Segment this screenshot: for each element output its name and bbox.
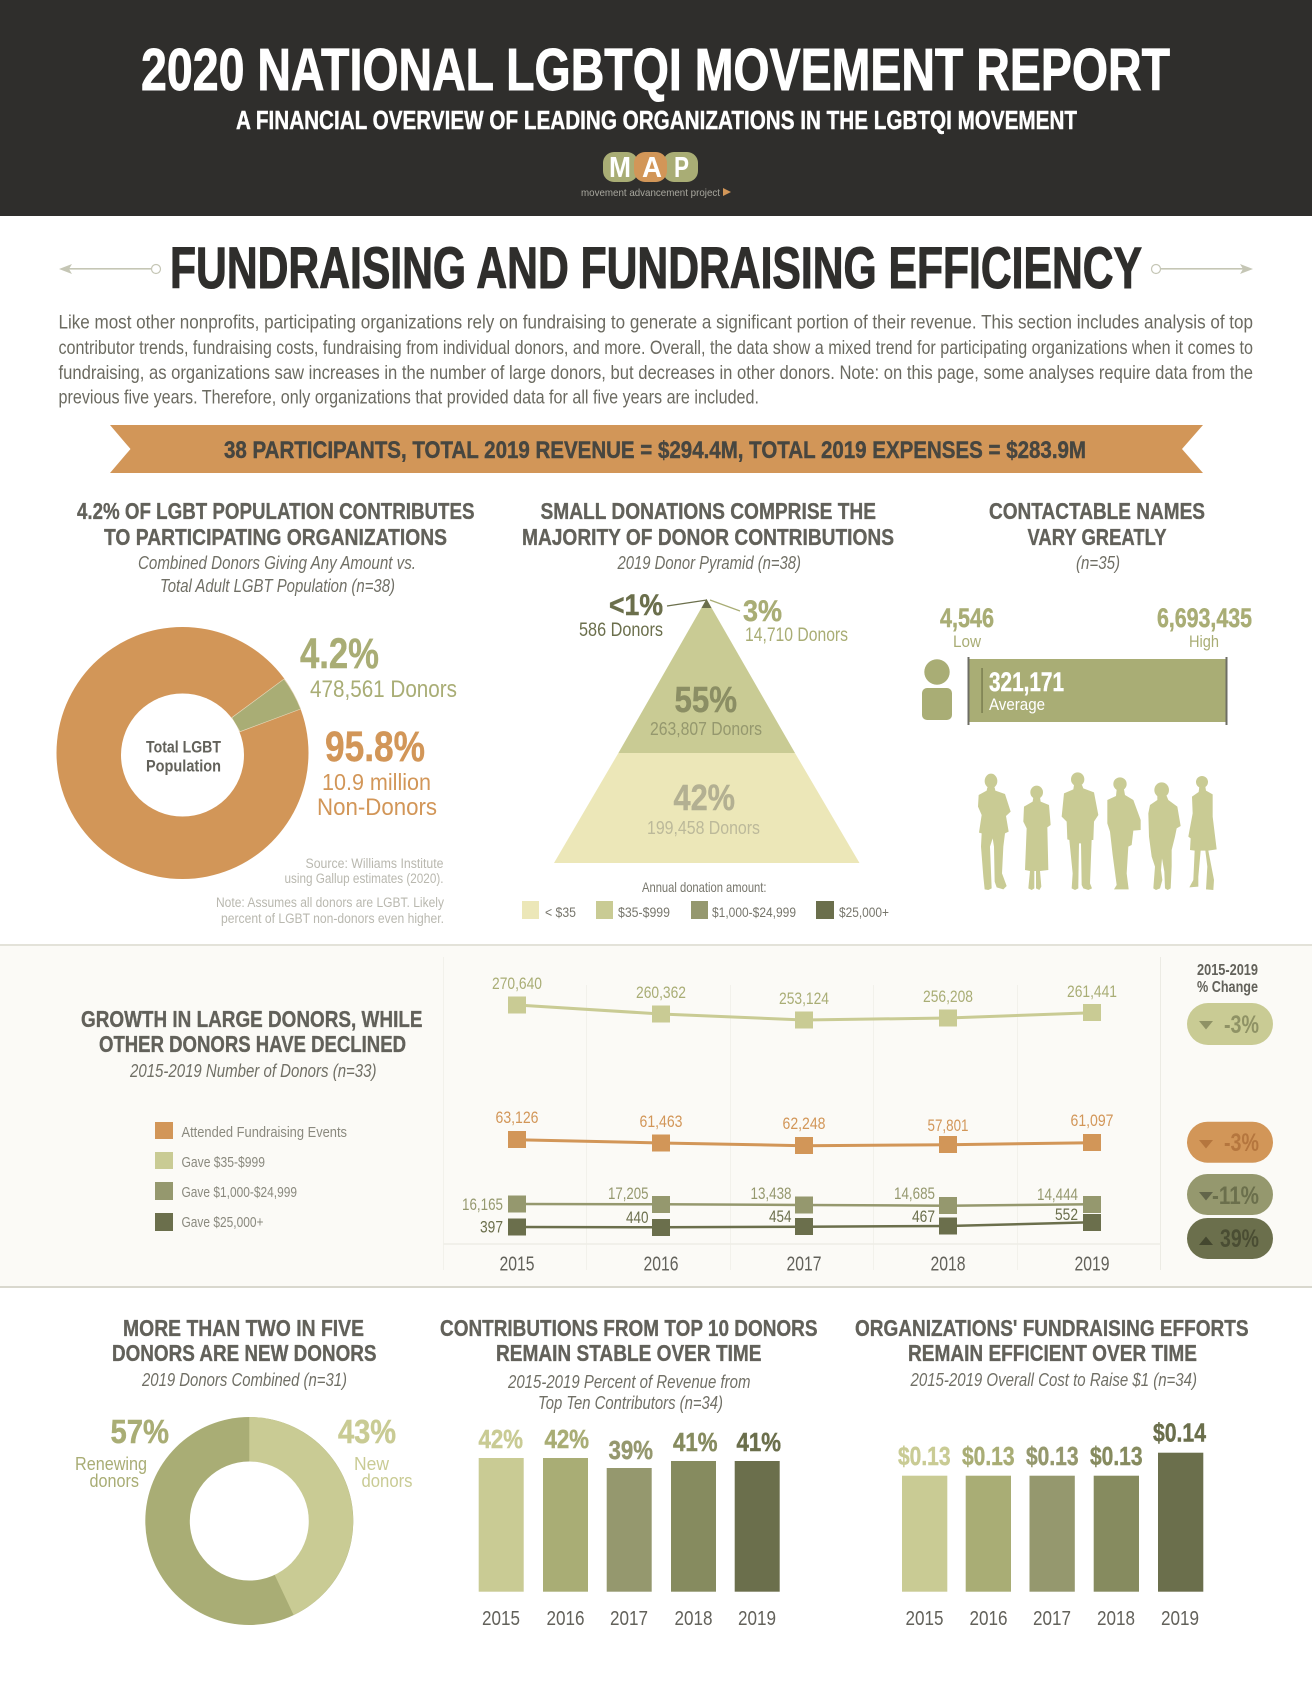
x-axis years: 2019 [738,1608,776,1630]
bar chart: 41% [673,1427,718,1457]
series: gave $1,000-$24,999: 13,438 [750,1185,792,1203]
series: attended fundraising events: 57,801 [928,1117,968,1135]
donut chart [56,627,308,879]
x-axis years: 2015 [906,1608,944,1630]
heading: TO PARTICIPATING ORGANIZATIONS [104,524,447,550]
series: gave $25,000+: 467 [912,1208,935,1226]
x-axis years [500,1254,1110,1276]
subheading: Combined Donors Giving Any Amount vs. [138,552,416,573]
x-axis years: 2018 [674,1608,712,1630]
stat: non-donors [317,723,437,821]
heading [81,1006,422,1057]
stat: donors: 478,561 Donors [310,676,457,703]
series: gave $35-$999 [492,975,1117,1028]
label: new donors [338,1413,412,1491]
x-axis years: 2015 [500,1254,534,1276]
heading: GROWTH IN LARGE DONORS, WHILE [81,1006,422,1032]
stat: low: Low [953,632,982,651]
x-axis years: 2015 [482,1608,520,1630]
label: renewing donors: 57% [110,1413,169,1450]
legend: Gave $35-$999 [182,1154,265,1171]
series: gave $35-$999: 261,441 [1067,983,1117,1001]
heading: DONORS ARE NEW DONORS [112,1340,376,1366]
heading: OTHER DONORS HAVE DECLINED [99,1031,406,1057]
pill: gave $25,000+: 39% [1220,1225,1259,1253]
icon: people silhouettes [978,772,1217,890]
series: attended fundraising events [496,1109,1114,1154]
panel: LGBT population donut [56,498,474,926]
bar chart: $0.13 [962,1441,1014,1471]
subheading: Total Adult LGBT Population (n=38) [160,575,395,596]
label: under 1%: 586 Donors [579,619,663,641]
heading: MORE THAN TWO IN FIVE [123,1315,364,1341]
bar chart [898,1418,1206,1592]
series: gave $25,000+: 440 [626,1209,648,1227]
legend: $35-$999 [618,904,670,920]
heading [440,1315,818,1366]
series: gave $1,000-$24,999: 14,685 [894,1185,935,1203]
source note: Source: Williams Institute [306,856,444,871]
heading: REMAIN STABLE OVER TIME [496,1340,762,1366]
pill: gave $1,000-$24,999 [1187,1174,1273,1215]
label: 3%: 14,710 Donors [745,624,848,646]
heading [77,498,474,550]
donut chart: Total LGBT [146,738,222,757]
x-axis years: 2018 [930,1254,966,1276]
legend: Annual donation amount: [642,879,766,895]
header banner [0,0,1312,216]
stat: non-donors: 10.9 million [322,769,431,795]
series: gave $25,000+: 397 [480,1219,503,1237]
ribbon banner: 38 PARTICIPANTS, TOTAL 2019 REVENUE = $294.4M, TOTAL 2019 EXPENSES = $283.9M [224,437,1086,464]
x-axis years: 2017 [1033,1608,1071,1630]
logo: MAP: movement advancement project [581,187,720,199]
x-axis years: 2019 [1074,1254,1110,1276]
range bar: 321,171 [989,667,1064,697]
stat: low: 4,546 [940,603,994,633]
x-axis years: 2016 [644,1254,678,1276]
pill: gave $35-$999: -3% [1224,1011,1259,1039]
x-axis years: 2017 [610,1608,648,1630]
percent change column [1187,962,1273,1259]
subheading [507,1371,750,1413]
arrow: right ornament [1152,264,1253,274]
stat: low [940,603,994,651]
series: gave $35-$999: 253,124 [779,990,829,1008]
x-axis years [482,1608,776,1630]
label: under 1% [579,589,663,641]
label: 55%: 263,807 Donors [650,718,762,739]
logo: MAP: M [609,152,631,184]
pyramid chart [554,599,860,863]
logo: MAP: P [674,152,689,184]
bar chart: $0.13 [1026,1441,1078,1471]
label: 55% [650,679,762,739]
series: gave $1,000-$24,999 [462,1185,1101,1214]
panel: top 10 donors bar chart [440,1315,818,1630]
x-axis years: 2019 [1161,1608,1199,1630]
range bar: Average [989,695,1045,714]
stat: high [1157,603,1252,651]
subheading: 2015-2019 Number of Donors (n=33) [129,1060,376,1081]
stat: high: 6,693,435 [1157,603,1252,633]
legend: Gave $25,000+ [182,1214,264,1231]
heading [989,498,1205,550]
bar chart: 41% [736,1427,781,1457]
subheading: 2019 Donors Combined (n=31) [141,1369,347,1390]
column heading: 2015-2019 [1197,962,1258,979]
series: attended fundraising events: 61,097 [1070,1112,1114,1130]
label: new donors: New [354,1453,390,1474]
bar chart: $0.13 [1090,1441,1142,1471]
legend: $1,000-$24,999 [712,904,796,920]
subheading: 2019 Donor Pyramid (n=38) [617,552,801,573]
bar chart [478,1424,781,1592]
legend: < $35 [545,904,576,920]
subheading: 2015-2019 Percent of Revenue from [507,1371,750,1392]
label: 42% [647,777,760,838]
intro paragraph: previous five years. Therefore, only organizations that provided data for all five years are included. [58,386,759,408]
stat: non-donors: 95.8% [325,723,425,771]
x-axis years [906,1608,1199,1630]
subheading: 2015-2019 Overall Cost to Raise $1 (n=34) [910,1369,1197,1390]
series: gave $25,000+: 454 [769,1208,792,1226]
source note: percent of LGBT non-donors even higher. [221,911,444,926]
bar chart: $0.14 [1153,1418,1206,1448]
label: 3% [743,595,848,646]
bar chart: $0.13 [898,1441,950,1471]
panel: contactable names [922,498,1252,890]
column heading [1197,962,1258,996]
logo: MAP: A [642,152,662,184]
label: 42%: 199,458 Donors [647,817,760,838]
arrow: left ornament [59,264,160,274]
series: attended fundraising events: 61,463 [640,1113,682,1131]
pill: gave $1,000-$24,999: -11% [1212,1182,1259,1210]
series: gave $35-$999: 256,208 [923,988,973,1006]
stat: non-donors: Non-Donors [317,794,437,821]
bar chart: 42% [478,1424,523,1454]
panel: cost to raise $1 bar chart [855,1315,1248,1630]
intro paragraph [58,312,1253,408]
heading: REMAIN EFFICIENT OVER TIME [908,1340,1197,1366]
series: gave $25,000+: 552 [1055,1206,1078,1224]
source note: Note: Assumes all donors are LGBT. Likely [216,895,444,910]
series: attended fundraising events: 63,126 [496,1109,538,1127]
icon: person [922,659,952,720]
label: renewing donors: donors [90,1470,139,1491]
panel: donor pyramid [522,498,894,920]
label: 3%: 3% [743,595,782,628]
subheading: (n=35) [1076,552,1120,573]
heading: VARY GREATLY [1028,524,1167,550]
bar chart: 39% [608,1435,653,1465]
column heading: % Change [1197,979,1258,996]
x-axis years: 2016 [546,1608,584,1630]
legend: Attended Fundraising Events [182,1124,347,1141]
logo: MAP [581,152,731,199]
x-axis years: 2017 [786,1254,822,1276]
source note [216,856,444,926]
panel: donor trends band [0,944,1312,1288]
subtitle: A FINANCIAL OVERVIEW OF LEADING ORGANIZATIONS IN THE LGBTQI MOVEMENT [236,105,1077,135]
label: new donors: 43% [338,1413,396,1450]
subheading: Top Ten Contributors (n=34) [538,1392,723,1413]
label: renewing donors: Renewing [75,1453,147,1474]
legend: Gave $1,000-$24,999 [182,1184,297,1201]
series: gave $35-$999: 270,640 [492,975,542,993]
donut chart: Population [146,757,221,776]
legend [522,879,889,920]
heading: 4.2% OF LGBT POPULATION CONTRIBUTES [77,498,474,524]
pill: attended events [1187,1122,1273,1163]
heading [112,1315,376,1366]
series: gave $35-$999: 260,362 [636,984,686,1002]
label: 42%: 42% [674,777,735,818]
pill: gave $35-$999 [1187,1003,1273,1045]
heading [855,1315,1248,1366]
label: under 1%: <1% [609,589,663,622]
pill: gave $25,000+ [1187,1218,1273,1259]
heading: SMALL DONATIONS COMPRISE THE [540,498,876,524]
line chart [444,957,1160,1276]
bar chart: 42% [544,1424,589,1454]
heading: CONTRIBUTIONS FROM TOP 10 DONORS [440,1315,818,1341]
subheading [138,552,416,596]
heading [522,498,894,550]
series: gave $1,000-$24,999: 17,205 [608,1185,648,1203]
heading: MAJORITY OF DONOR CONTRIBUTIONS [522,524,894,550]
label: new donors: donors [362,1470,412,1491]
series: gave $1,000-$24,999: 14,444 [1037,1186,1078,1204]
series: attended fundraising events: 62,248 [782,1115,826,1133]
label: 55%: 55% [674,679,737,720]
heading: CONTACTABLE NAMES [989,498,1205,524]
legend: $25,000+ [839,904,889,920]
stat: high: High [1189,632,1219,651]
stat: donors [300,630,457,703]
source note: using Gallup estimates (2020). [284,871,444,886]
pill: attended events: -3% [1224,1129,1259,1157]
ribbon banner [110,425,1203,473]
series: gave $1,000-$24,999: 16,165 [462,1196,503,1214]
series: gave $25,000+ [480,1206,1101,1237]
legend [155,1122,347,1231]
panel: new donors donut [75,1315,412,1625]
label: renewing donors [75,1413,169,1491]
range bar [968,657,1228,725]
x-axis years: 2018 [1097,1608,1135,1630]
x-axis years: 2016 [970,1608,1008,1630]
stat: donors: 4.2% [300,630,379,678]
donut chart [145,1417,353,1625]
